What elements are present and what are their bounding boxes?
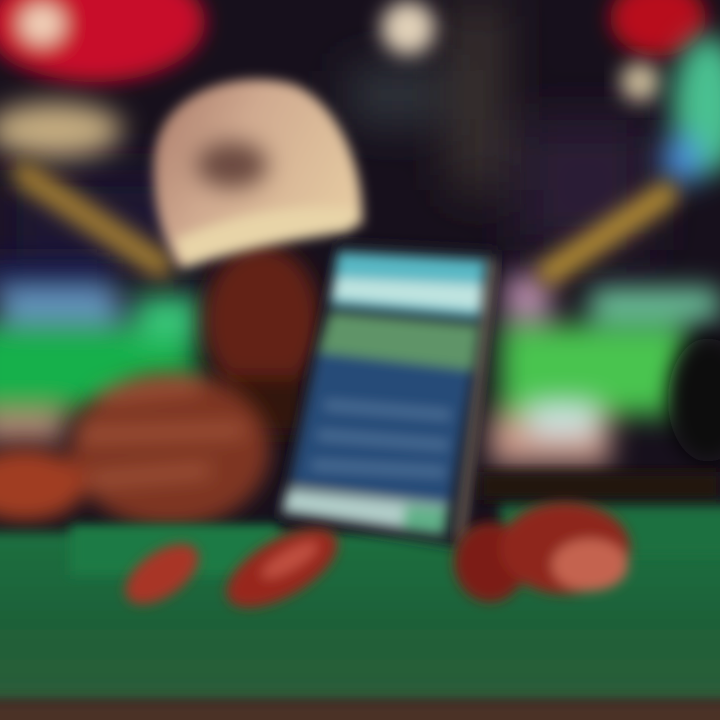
red light top right [610, 0, 706, 56]
cap [154, 79, 362, 268]
player face and neck [204, 245, 320, 435]
phone [278, 242, 498, 548]
gold stick right [550, 195, 665, 272]
background: dark right shape [668, 338, 720, 462]
background: green band left [0, 262, 200, 442]
phone edge [460, 260, 492, 540]
background: dark upper wall [0, 0, 650, 280]
table [0, 532, 720, 704]
cream light left [0, 102, 123, 158]
table edge [0, 700, 720, 720]
band behind table [480, 472, 720, 500]
hand and forearm [0, 372, 270, 528]
small lamp right [620, 62, 660, 102]
gold stick left [25, 175, 160, 265]
poker chips left [115, 513, 350, 623]
phone screen [282, 252, 486, 535]
white lamp top centre [381, 1, 435, 55]
poker chips right [454, 502, 630, 602]
phone body [278, 242, 498, 548]
teal and blue shape right [662, 35, 720, 186]
red light top left [0, 0, 205, 82]
background: green band right [490, 275, 720, 465]
